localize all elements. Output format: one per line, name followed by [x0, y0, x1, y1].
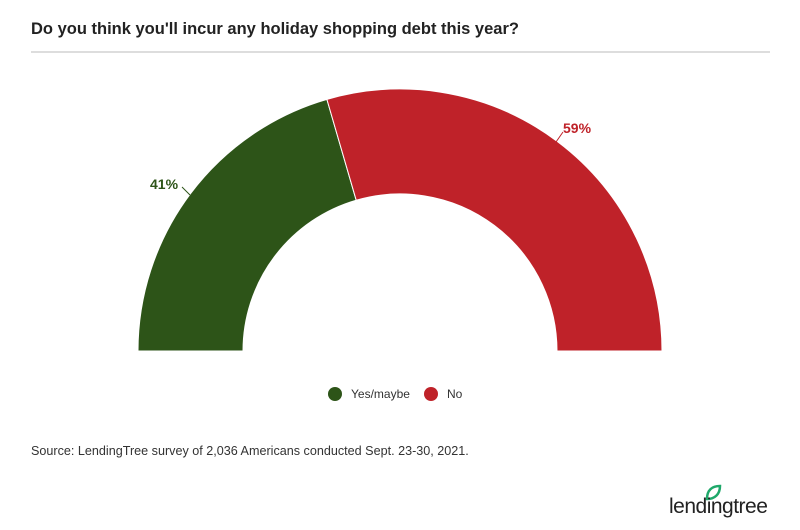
legend: Yes/maybe	[351, 387, 410, 401]
legend: No	[447, 387, 463, 401]
label: 59%: 59%	[563, 120, 592, 136]
icon: logo leaf	[707, 486, 720, 499]
segment: no 59%	[327, 89, 662, 351]
label: 41%	[150, 176, 190, 195]
legend	[328, 387, 463, 401]
label: 59%	[556, 120, 592, 142]
source text: Source: LendingTree survey of 2,036 Americans conducted Sept. 23-30, 2021.	[31, 444, 469, 458]
title: Do you think you'll incur any holiday shopping debt this year?	[31, 20, 519, 38]
label: 41%: 41%	[150, 176, 179, 192]
logo: lendingtree	[669, 495, 767, 518]
segment: yes/maybe 41%	[138, 99, 356, 351]
